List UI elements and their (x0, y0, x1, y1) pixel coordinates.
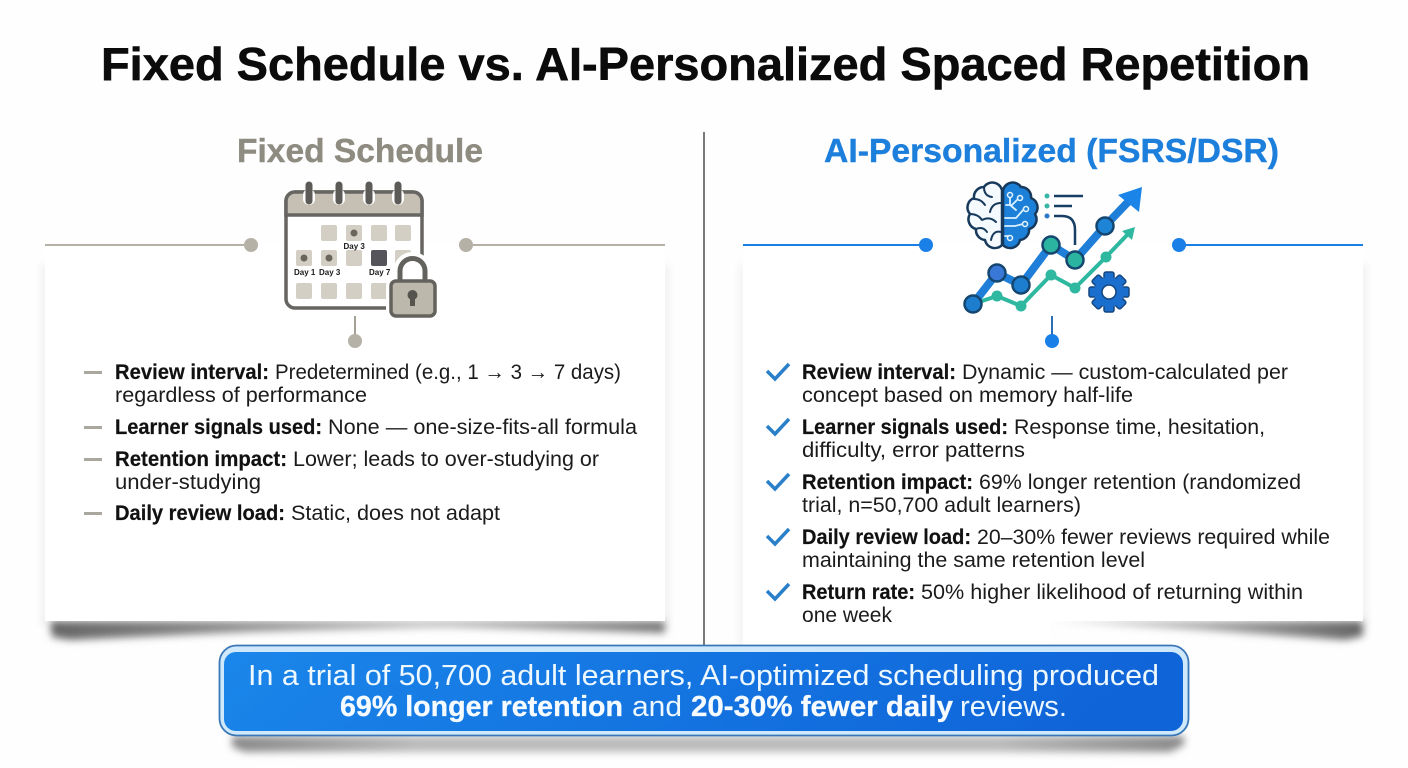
connector lines (45, 238, 665, 348)
brain (967, 183, 1038, 248)
item: return rate: 50% higher likelihood of returning within (921, 580, 1303, 604)
gear (1089, 272, 1129, 312)
center divider (703, 132, 705, 652)
item: learner signals: None — one-size-fits-all formula (328, 415, 637, 439)
list: AI-personalized points (767, 360, 1330, 627)
item: review interval: Dynamic — custom-calculated per (962, 360, 1288, 384)
item: retention impact: 69% longer retention (randomized (979, 470, 1301, 494)
item: retention impact: Retention impact: (802, 470, 973, 494)
blue trend line (964, 187, 1142, 312)
item: retention impact: Lower; leads to over-studying or (293, 447, 599, 471)
list glyph (1044, 194, 1083, 245)
item: learner signals (84, 415, 637, 439)
callout text: In a trial of 50,700 adult learners, AI-optimized scheduling produced (248, 660, 1159, 692)
list: fixed schedule points (84, 360, 637, 525)
icon: locked calendar: Day 7 (369, 268, 391, 277)
callout text (248, 660, 1159, 723)
callout text: 69% longer retention (340, 691, 623, 723)
icon: locked calendar: Day 3 (344, 242, 365, 251)
title: Fixed Schedule vs. AI-Personalized Spaced Repetition (101, 38, 1310, 90)
item: review interval: Review interval: (115, 360, 269, 384)
item: daily review load: Daily review load: (802, 525, 971, 549)
panel: fixed schedule (42, 133, 668, 640)
item: daily review load: Daily review load: (115, 501, 285, 525)
item: return rate: Return rate: (802, 580, 915, 604)
item: daily review load: maintaining the same retention level (802, 548, 1145, 572)
item: retention impact (84, 447, 599, 494)
callout text: reviews. (960, 691, 1067, 723)
item: daily review load: 20–30% fewer reviews required while (977, 525, 1330, 549)
item: daily review load (767, 525, 1330, 572)
item: review interval: concept based on memory half-life (802, 383, 1133, 407)
item: return rate (767, 580, 1303, 627)
callout text: 20-30% fewer daily (691, 691, 953, 723)
item: return rate: one week (802, 603, 892, 627)
item: review interval (767, 360, 1288, 407)
item: learner signals: difficulty, error patterns (802, 438, 1025, 462)
icon: locked calendar (286, 185, 435, 316)
item: review interval: Review interval: (802, 360, 956, 384)
item: learner signals: Response time, hesitation, (1014, 415, 1265, 439)
green trend line (973, 227, 1135, 312)
connector lines (743, 238, 1363, 348)
panel: AI-personalized (740, 133, 1366, 645)
item: retention impact: under-studying (115, 470, 261, 494)
item: review interval: regardless of performance (115, 383, 367, 407)
item: review interval (84, 360, 621, 407)
item: retention impact: trial, n=50,700 adult learners) (802, 493, 1081, 517)
icon: locked calendar: Day 3 (319, 268, 341, 277)
item: daily review load (84, 501, 500, 525)
heading: fixed schedule: Fixed Schedule (237, 133, 483, 170)
item: review interval: Predetermined (e.g., 1 → 3 → 7 days) (275, 360, 621, 384)
callout text: and (632, 691, 682, 723)
item: learner signals: Learner signals used: (802, 415, 1008, 439)
item: retention impact: Retention impact: (115, 447, 287, 471)
item: retention impact (767, 470, 1301, 517)
callout: key finding (220, 646, 1188, 752)
item: learner signals (767, 415, 1265, 462)
item: daily review load: Static, does not adapt (291, 501, 500, 525)
heading: AI-personalized: AI-Personalized (FSRS/DSR) (824, 133, 1279, 170)
icon: locked calendar: Day 1 (294, 268, 316, 277)
item: learner signals: Learner signals used: (115, 415, 322, 439)
icon: brain and growth chart (964, 183, 1142, 312)
